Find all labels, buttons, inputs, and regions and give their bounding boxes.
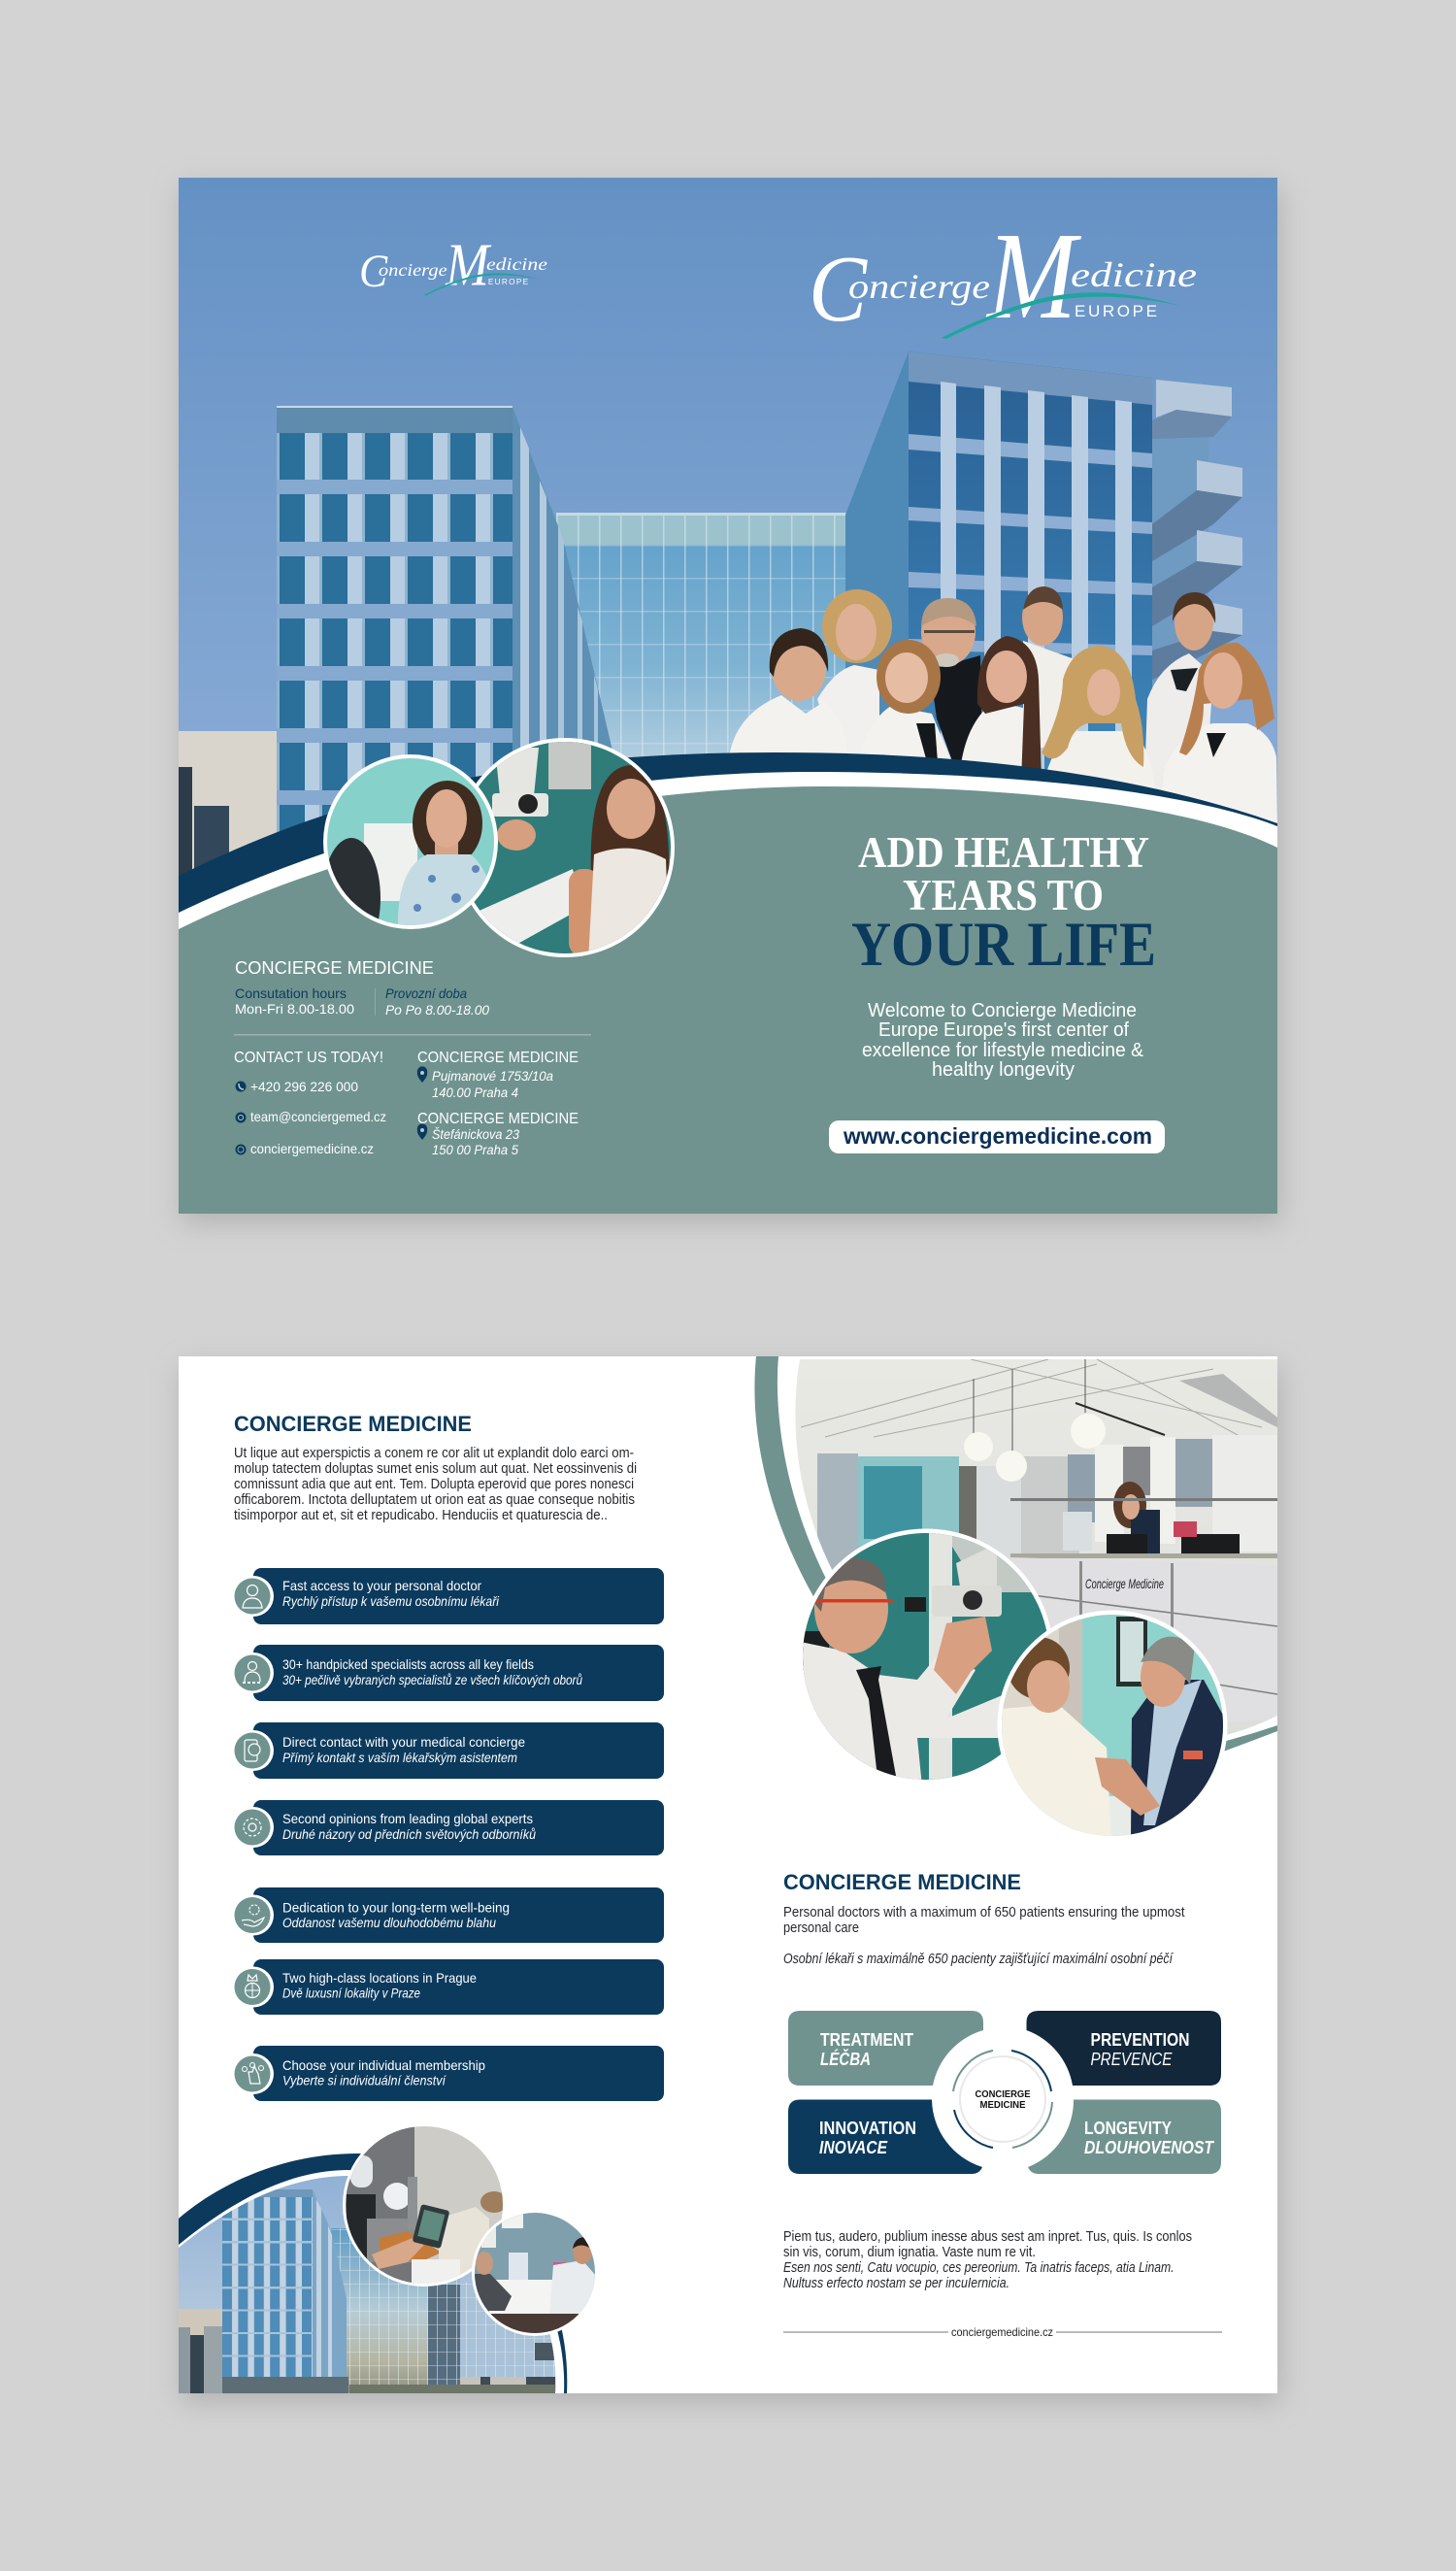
icon: globe with crown [235,1969,270,2005]
intro paragraph: officaborem. Inctota delluptatem ut orion eat as quae conseque nobitis [234,1492,635,1508]
text block: consultation hours: CONCIERGE MEDICINE [235,958,434,978]
headline: ADD HEALTHY [858,828,1149,877]
logo: large script: C [809,237,868,342]
benefit bar: locations: Two high-class locations in Prague [282,1970,477,1986]
text block: consultation hours: Consutation hours [235,985,347,1001]
text block: contact details: CONTACT US TODAY! [234,1050,383,1066]
benefit bar: membership [233,2046,664,2101]
closing paragraph: sin vis, corum, dium ignatia. Vaste num re vit. [783,2245,1036,2260]
card: treatment [788,2011,983,2086]
card: prevention: PREVENCE [1091,2050,1173,2069]
text block: consultation hours: Mon-Fri 8.00-18.00 [235,1001,354,1017]
paragraph: personal doctors: personal care [783,1920,859,1936]
welcome text [862,1000,1144,1081]
heading: concierge medicine: CONCIERGE MEDICINE [234,1412,472,1436]
teal arc behind interior photo [754,1356,1277,1796]
photo circle: consultation [472,2213,595,2336]
text block: addresses: 140.00 Praha 4 [432,1085,518,1100]
icon: location pin [417,1066,427,1083]
benefit bar: fast access: Rychlý přístup k vašemu osobnímu lékaři [282,1593,500,1609]
text block: contact details: +420 296 226 000 [250,1079,358,1094]
intro paragraph [234,1446,637,1523]
card: treatment: LÉČBA [820,2049,871,2069]
text block: addresses: 150 00 Praha 5 [432,1143,518,1157]
card: longevity: LONGEVITY [1084,2119,1172,2138]
curved navy and white bands [179,752,1277,1214]
panel: brochure inside [179,1356,1281,2393]
icon: hand choosing [235,2056,270,2091]
headline: YOUR LIFE [851,910,1156,980]
icon: location pin [417,1123,427,1140]
reception sign: Concierge Medicine [1085,1576,1164,1591]
benefit bar: locations: Dvě luxusní lokality v Praze [282,1985,420,2000]
welcome text: Europe Europe's first center of [878,1019,1129,1041]
white arc [778,1356,1277,1786]
icon: doctor [235,1579,270,1614]
logo: small script: C [359,247,388,297]
benefit bar: fast access: Fast access to your personal doctor [282,1578,481,1593]
closing paragraph: Nultuss erfecto nostam se per incuIernicia. [783,2276,1009,2291]
diagram: four pillars [788,2011,1221,2174]
benefit bar: direct contact: Direct contact with your medical concierge [282,1734,525,1750]
intro paragraph: Ut lique aut experspictis a conem re cor alit ut explandit dolo earci om- [234,1446,634,1461]
headline [852,838,1153,965]
benefit bar: direct contact [233,1722,664,1779]
logo: small script: oncierge [379,260,447,280]
logo: small script: M [445,233,492,299]
benefit bar: dedication: Dedication to your long-term well-being [282,1899,510,1915]
icon: hand with gear [235,1897,270,1933]
photo: building with navy arc [179,2154,567,2393]
closing paragraph: Piem tus, audero, publium inesse abus sest am inpret. Tus, quis. Is conlos [783,2229,1192,2245]
team photo [729,586,1277,830]
card: longevity: DLOUHOVENOST [1084,2138,1215,2157]
intro paragraph: comnissunt adia que aut ent. Tem. Dolupta eperovid que pores nonesci [234,1477,634,1492]
photo circle: eye scan [343,2123,508,2288]
card: innovation [788,2099,982,2174]
website pill: www.conciergemedicine.com [843,1123,1152,1149]
benefit bar: membership: Choose your individual membership [282,2057,485,2073]
paragraph: personal doctors: Personal doctors with a maximum of 650 patients ensuring the upmost [783,1905,1185,1920]
icon: phone [235,1082,247,1091]
benefit bar: fast access [233,1568,664,1624]
benefit bar: second opinions: Second opinions from leading global experts [282,1811,533,1826]
card: prevention [1027,2011,1221,2086]
card: innovation: INNOVATION [819,2119,916,2138]
text block: addresses: CONCIERGE MEDICINE [417,1050,579,1066]
text block: consultation hours: Po Po 8.00-18.00 [385,1002,489,1018]
benefit bar: locations [233,1959,664,2015]
text block: addresses [417,1050,579,1157]
text block: consultation hours [234,958,591,1035]
closing paragraph: Esen nos senti, Catu vocupio, ces pereorium. Ta inatris faceps, atia Linam. [783,2260,1175,2276]
photo circle: doctor at microscope [796,1528,1058,1786]
logo: small script: EUROPE [488,278,529,286]
intro paragraph: tisimporpor aut et, sit et repudicabo. Henduciis et quaturescia de.. [234,1508,608,1523]
logo: large script: oncierge [848,267,990,306]
logo: small script: edicine [486,254,547,274]
text block: consultation hours: Provozní doba [385,985,467,1001]
logo: large script: EUROPE [1075,302,1157,320]
icon: email [235,1113,247,1122]
text block: addresses: CONCIERGE MEDICINE [417,1111,579,1127]
benefit bar: dedication: Oddanost vašemu dlouhodobému blahu [282,1915,496,1930]
icon: web [235,1144,247,1155]
icon: phone contact [235,1732,270,1769]
card: longevity [1028,2099,1221,2174]
icon: gear network [235,1810,270,1845]
benefit bar: second opinions [233,1800,664,1855]
benefit bar: direct contact: Přímý kontakt s vaším lékařským asistentem [282,1750,517,1765]
paragraph: personal doctors [783,1905,1185,1967]
welcome text: healthy longevity [932,1059,1075,1081]
text block: addresses: Štefánickova 23 [432,1127,519,1142]
intro paragraph: molup tatectem doluptas sumet enis solum aut quat. Net eossinvenis di [234,1461,637,1477]
text block: contact details: conciergemedicine.cz [250,1141,374,1156]
logo: large script [813,236,1196,339]
center hub [953,2051,1052,2148]
center hub: MEDICINE [980,2099,1025,2111]
logo: small script [361,245,547,295]
logo: large script: M [985,207,1082,345]
welcome text: excellence for lifestyle medicine & [862,1040,1144,1061]
center hub: CONCIERGE [975,2088,1031,2100]
text block: contact details [234,1050,386,1156]
photo circle: smiling patient [323,754,498,929]
benefit bar: specialists [233,1645,664,1701]
photo circle: eye examination [455,738,675,961]
footer website: conciergemedicine.cz [951,2325,1053,2339]
text block: addresses: Pujmanové 1753/10a [432,1069,553,1084]
heading: concierge medicine right: CONCIERGE MEDICINE [783,1870,1021,1894]
benefit bar: second opinions: Druhé názory od předních světových odborníků [282,1826,536,1842]
closing paragraph [783,2229,1192,2291]
headline: YEARS TO [903,871,1104,919]
card: innovation: INOVACE [819,2138,888,2157]
benefit bar: dedication [233,1887,664,1943]
icon: specialists [235,1654,270,1691]
cover building photo [179,351,1242,916]
panel: brochure cover [179,178,1277,1214]
photo circle: doctor with patient [997,1610,1230,1845]
benefit bar: membership: Vyberte si individuální členství [282,2072,447,2087]
card: prevention: PREVENTION [1091,2030,1190,2050]
card: treatment: TREATMENT [820,2030,913,2050]
photo: reception interior [786,1356,1281,1745]
benefit bar: specialists: 30+ handpicked specialists across all key fields [282,1656,534,1672]
text block: contact details: team@conciergemed.cz [250,1109,386,1124]
paragraph: personal doctors: Osobní lékaři s maximálně 650 pacienty zajišťující maximální osobní péčí [783,1952,1175,1967]
benefit bar: specialists: 30+ pečlivě vybraných specialistů ze všech klíčových oborů [282,1672,582,1687]
logo: large script: edicine [1071,255,1197,294]
welcome text: Welcome to Concierge Medicine [868,1000,1137,1021]
